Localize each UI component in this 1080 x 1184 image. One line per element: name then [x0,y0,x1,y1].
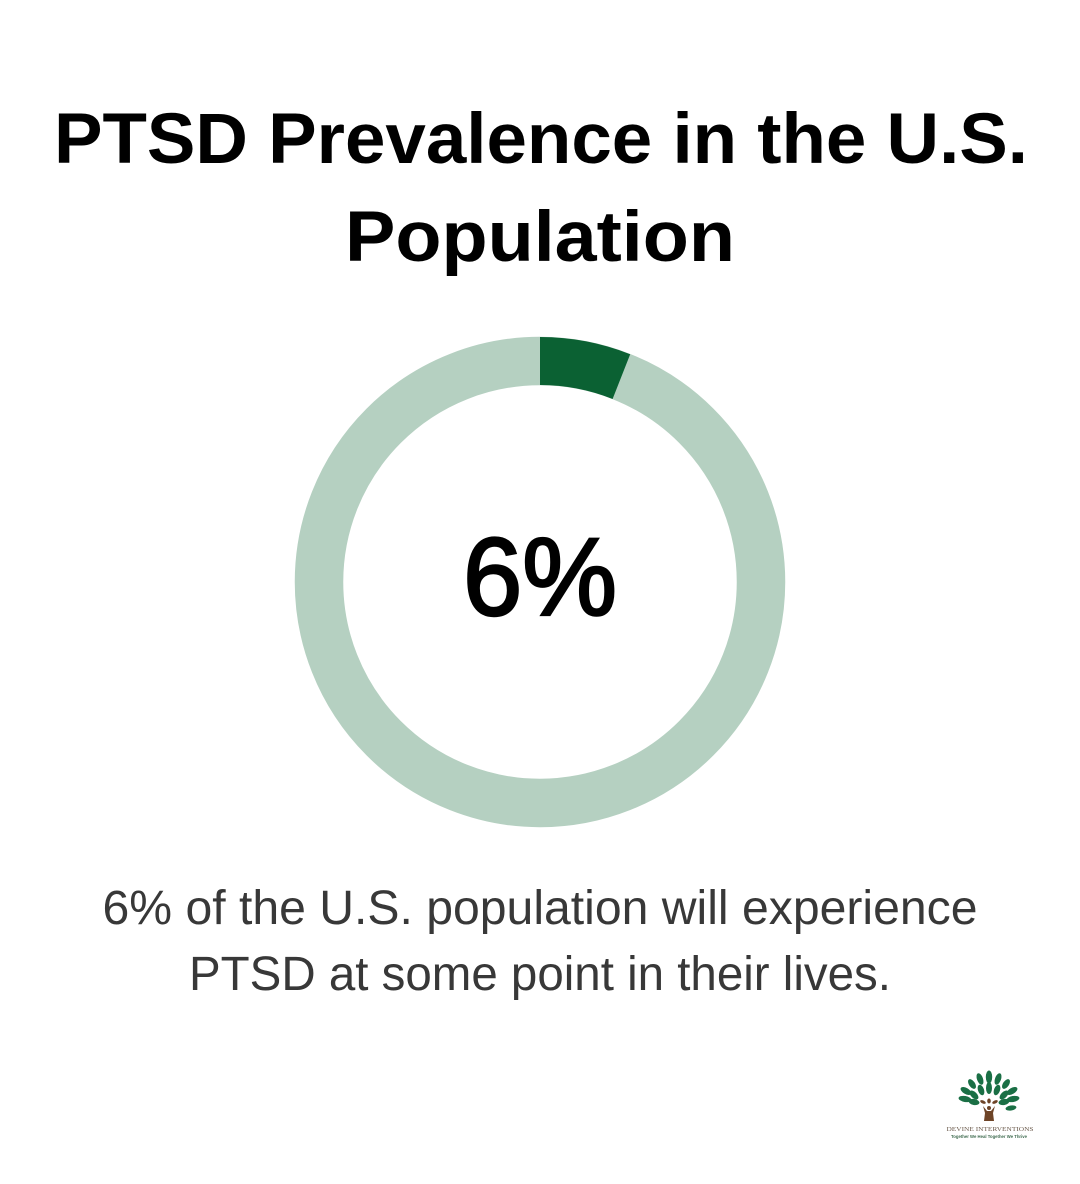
description text: PTSD at some point in their lives. [189,948,891,1001]
donut segment: 6% [540,337,630,399]
logo name: DEVINE INTERVENTIONS [946,1126,1034,1133]
title: Population [345,198,735,277]
donut track [319,361,761,803]
donut chart: 6% [319,337,761,803]
description text: 6% of the U.S. population will experience [102,882,977,935]
title: PTSD Prevalence in the U.S. [54,100,1028,179]
logo tagline: Together We Heal Together We Thrive [951,1134,1027,1139]
title [54,100,1028,277]
icon: tree trunk figure [980,1098,998,1121]
donut center value: 6% [463,516,617,639]
logo: Devine Interventions [946,1070,1034,1139]
icon: tree leaves [958,1070,1020,1111]
description text [102,882,977,1001]
